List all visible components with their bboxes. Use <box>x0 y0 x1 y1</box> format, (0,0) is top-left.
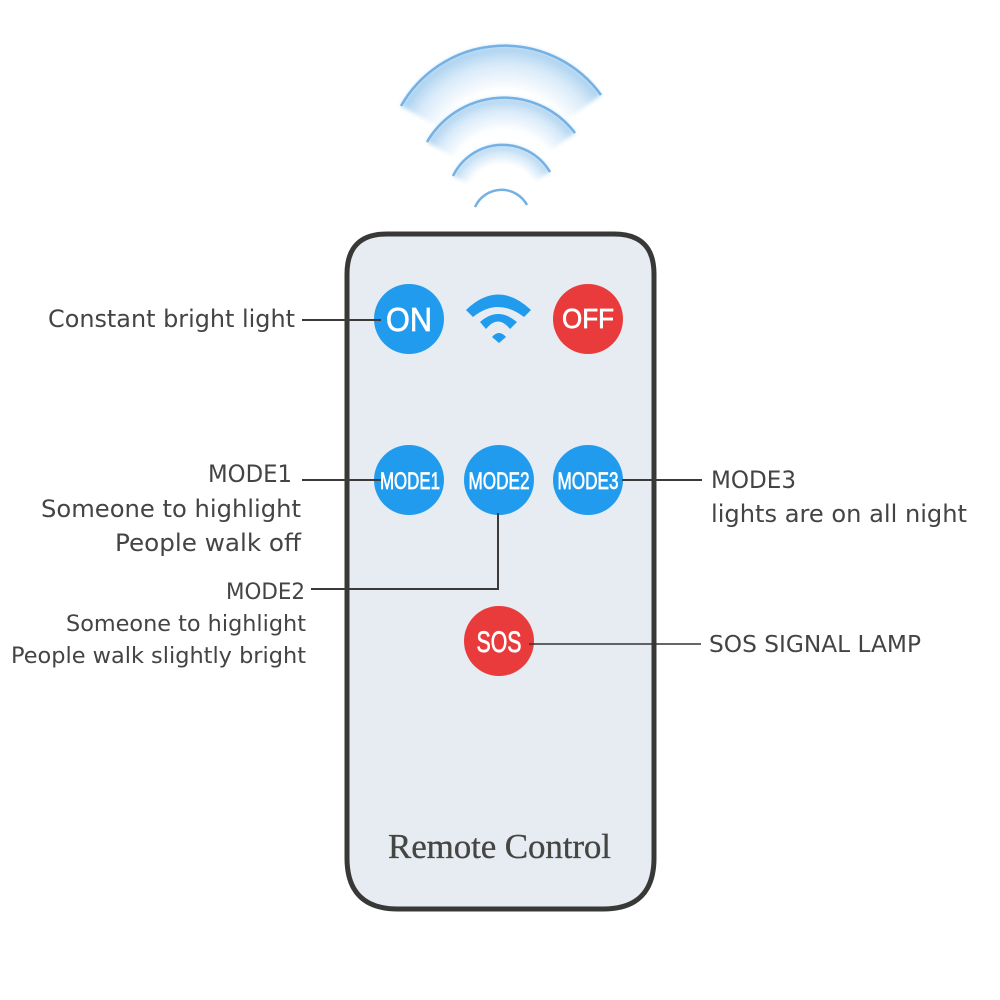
label: MODE2 description: Someone to highlight <box>66 611 306 637</box>
label: MODE2 description <box>11 579 306 669</box>
label: constant bright light: Constant bright light <box>48 305 295 333</box>
button: OFF <box>553 284 623 354</box>
button: MODE1 <box>374 445 444 515</box>
label: MODE2 description: MODE2 <box>226 579 305 605</box>
label: MODE1 description: People walk off <box>115 529 301 557</box>
button: MODE1: MODE1 <box>380 468 440 495</box>
label: MODE3 description: MODE3 <box>711 466 796 494</box>
leader line: MODE3 <box>622 479 702 481</box>
label: MODE1 description: Someone to highlight <box>41 495 301 523</box>
button: MODE2 <box>464 445 534 515</box>
remote control body <box>347 234 654 909</box>
button: MODE2: MODE2 <box>468 468 530 495</box>
button: ON: ON <box>386 301 432 338</box>
leader line: ON <box>302 319 381 321</box>
leader line: MODE1 <box>302 479 381 481</box>
label: MODE1 description: MODE1 <box>208 460 292 488</box>
remote control label: Remote Control <box>388 827 611 866</box>
leader line: MODE2 <box>311 513 498 589</box>
label: MODE3 description: lights are on all night <box>711 500 967 528</box>
label: MODE3 description <box>711 466 967 528</box>
button: MODE3 <box>553 445 623 515</box>
label: SOS signal lamp: SOS SIGNAL LAMP <box>709 632 921 658</box>
label: MODE2 description: People walk slightly bright <box>11 643 306 669</box>
icon: wifi symbol <box>466 294 531 343</box>
button: ON <box>374 284 444 354</box>
button: SOS: SOS <box>476 626 522 659</box>
label: MODE1 description <box>41 460 301 557</box>
icon: wireless signal waves <box>401 46 601 207</box>
button: SOS <box>464 606 534 676</box>
button: OFF: OFF <box>562 303 614 334</box>
button: MODE3: MODE3 <box>558 468 618 495</box>
leader line: SOS <box>529 643 701 645</box>
